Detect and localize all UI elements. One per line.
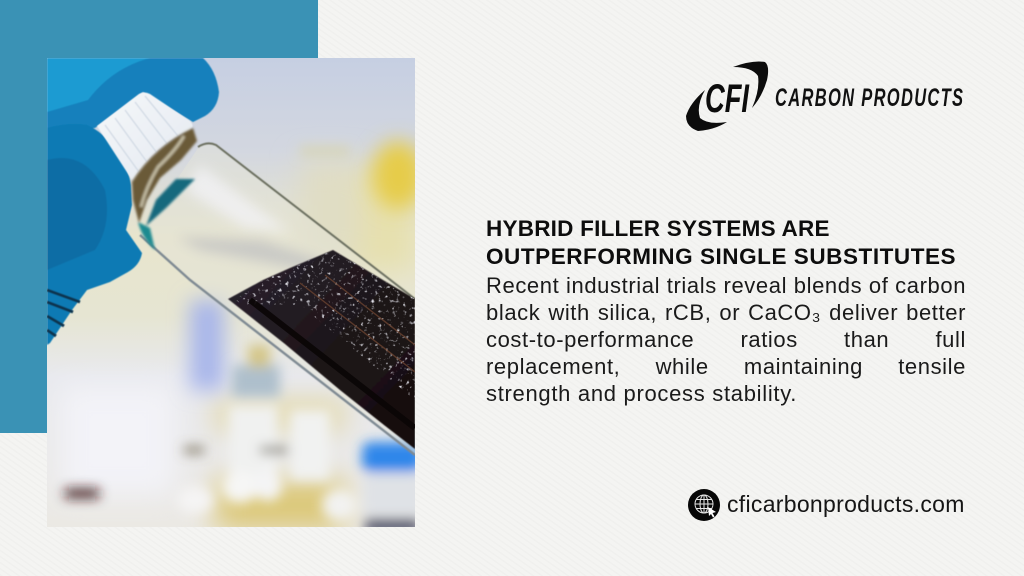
logo wordmark: CARBON PRODUCTS [775,84,964,112]
body text: cost-to-performance ratios than full [486,327,966,352]
heading: OUTPERFORMING SINGLE SUBSTITUTES [486,244,956,269]
blurred laboratory background [47,58,424,531]
logo: CFI Carbon Products [686,62,964,131]
icon: CFI swoosh mark [686,62,768,131]
body text: black with silica, rCB, or CaCO₃ deliver better [486,300,966,325]
icon: CFI swoosh mark: CFI [705,77,750,121]
vial neck [132,128,197,250]
body text: Recent industrial trials reveal blends of carbon [486,273,966,298]
white vial cap [97,92,192,180]
heading [486,216,956,269]
heading: HYBRID FILLER SYSTEMS ARE [486,216,830,241]
glass vial [140,143,415,455]
panel: blue backing rectangle [0,0,318,433]
blue glove fingers [47,58,219,345]
text block: heading and body [486,216,966,406]
body text: strength and process stability. [486,381,797,406]
body text [486,273,966,406]
website link [688,489,965,521]
photo: gloved hand holding a vial of carbon black [47,58,415,527]
website address: cficarbonproducts.com [727,491,965,517]
icon: globe with cursor [688,489,720,521]
carbon black granules in vial [225,245,420,449]
body text: replacement, while maintaining tensile [486,354,966,379]
